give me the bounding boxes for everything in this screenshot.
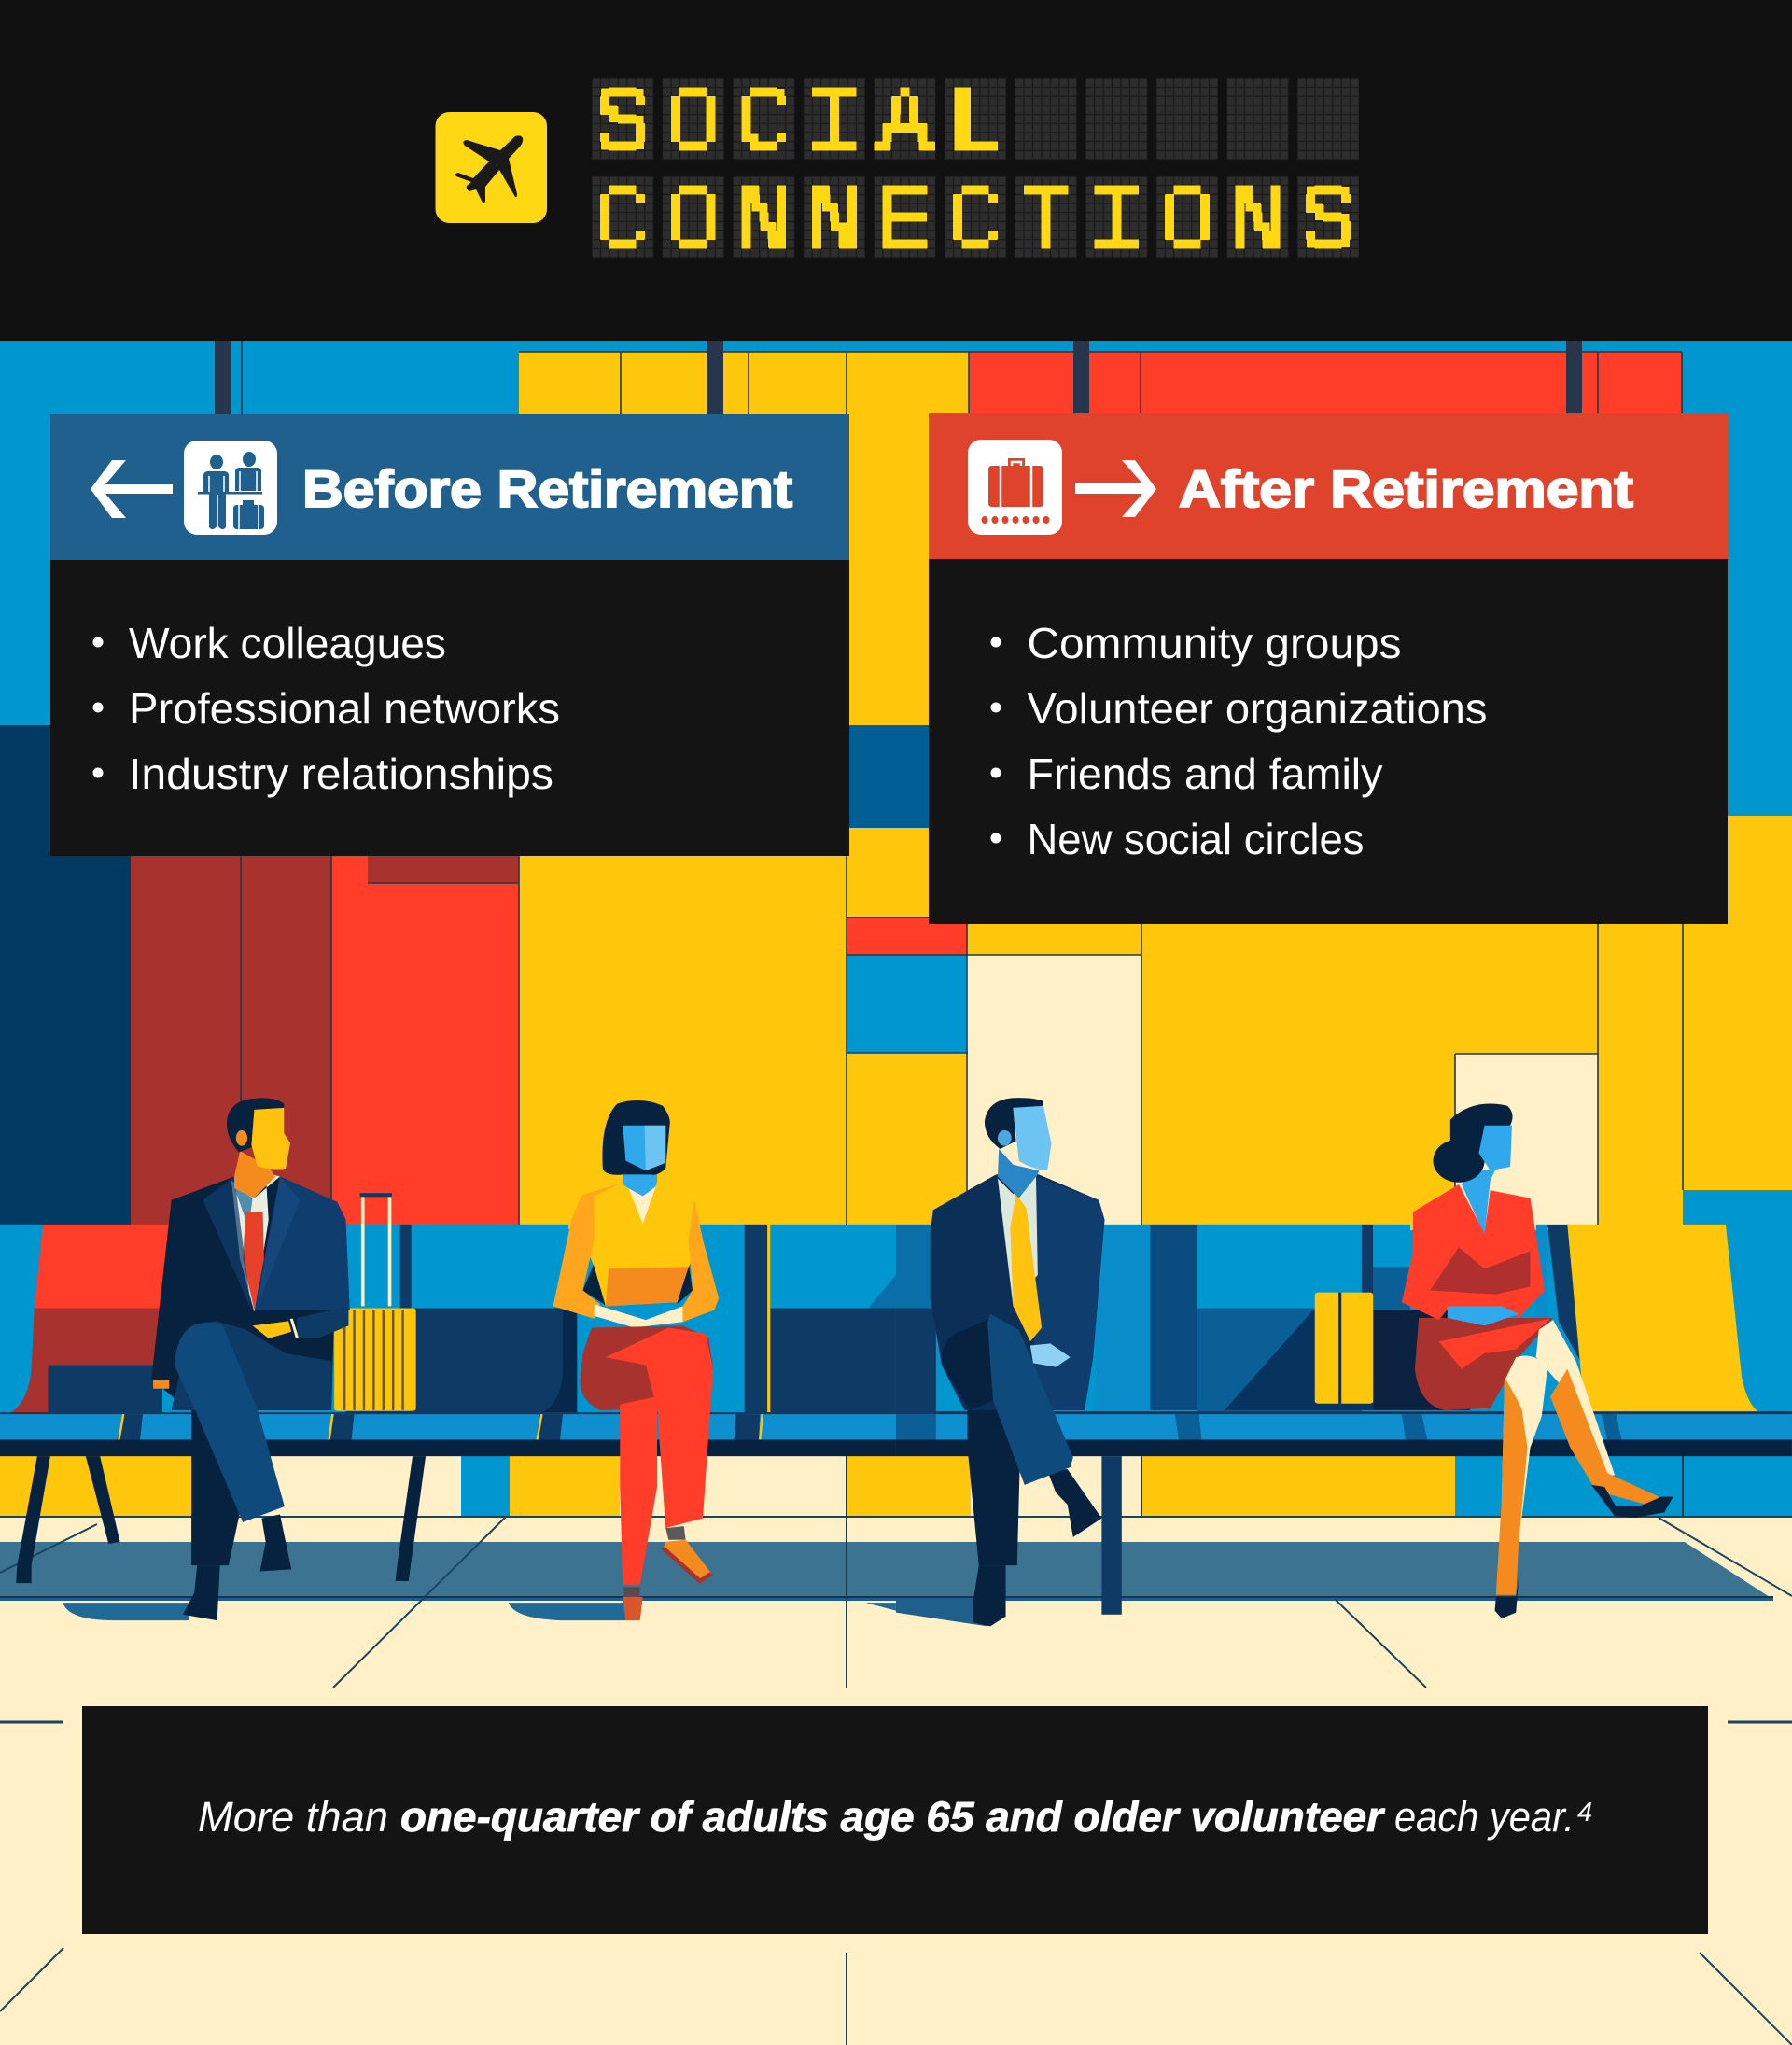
man with red tie — [151, 1098, 350, 1620]
bullet list: Friends and family — [1027, 749, 1383, 798]
bench legs left — [16, 1456, 426, 1583]
seat backs right — [896, 1225, 1758, 1412]
lower wall strip behind bench — [0, 1456, 1792, 1598]
floor shadow right — [896, 1599, 987, 1626]
woman in yellow and red — [553, 1100, 719, 1620]
icon: travellers — [184, 441, 277, 535]
woman in red — [1402, 1103, 1673, 1618]
bullet list: Professional networks — [129, 684, 560, 733]
callout: volunteer statistic: 4 — [1577, 1798, 1592, 1828]
heading: After Retirement — [1179, 459, 1633, 518]
title: flight board SOCIAL — [592, 73, 1359, 178]
callout: volunteer statistic: More than — [198, 1793, 388, 1841]
callout: volunteer statistic — [82, 1706, 1708, 1934]
sign header red — [929, 413, 1728, 559]
icon: left arrow — [91, 460, 173, 518]
seat cushions and bar right — [896, 1411, 1792, 1456]
title: flight board SOCIAL: SOCIAL — [595, 73, 1003, 178]
bullet list: New social circles — [1027, 815, 1365, 863]
icon: baggage claim — [968, 440, 1062, 535]
bench leg right — [1101, 1456, 1122, 1615]
icon: right arrow — [1075, 460, 1156, 517]
bullet list: Work colleagues — [129, 619, 446, 667]
bullet list: Industry relationships — [129, 749, 553, 798]
callout: volunteer statistic: each year. — [1394, 1793, 1575, 1841]
right half of scene: seats and two travellers — [896, 1098, 1792, 1626]
bullet list — [991, 619, 1488, 863]
sign hanger poles — [215, 341, 1582, 415]
left half of scene: seats and two travellers — [0, 1098, 896, 1620]
bullet list — [93, 619, 560, 798]
panel: after retirement — [929, 413, 1728, 924]
icon: airplane badge — [435, 112, 547, 223]
callout: volunteer statistic: one-quarter of adults age 65 and older volunteer — [400, 1793, 1386, 1841]
floor shadows left — [63, 1603, 896, 1620]
bullet list: Community groups — [1027, 619, 1402, 667]
heading: Before Retirement — [302, 459, 792, 518]
panel: before retirement — [50, 414, 849, 856]
floor and shadow — [0, 1517, 1792, 2045]
terminal wall colour blocks — [0, 341, 1792, 1519]
seat cushions and bar left — [0, 1412, 896, 1456]
small yellow suitcase — [1315, 1293, 1373, 1404]
seat backs left — [0, 1225, 896, 1412]
man with yellow tie — [931, 1098, 1104, 1626]
bullet list: Volunteer organizations — [1027, 684, 1488, 733]
title: flight board CONNECTIONS: CONNECTIONS — [595, 171, 1356, 276]
suitcase with handle — [334, 1193, 416, 1411]
header band — [0, 0, 1792, 341]
sign header blue — [50, 414, 849, 560]
